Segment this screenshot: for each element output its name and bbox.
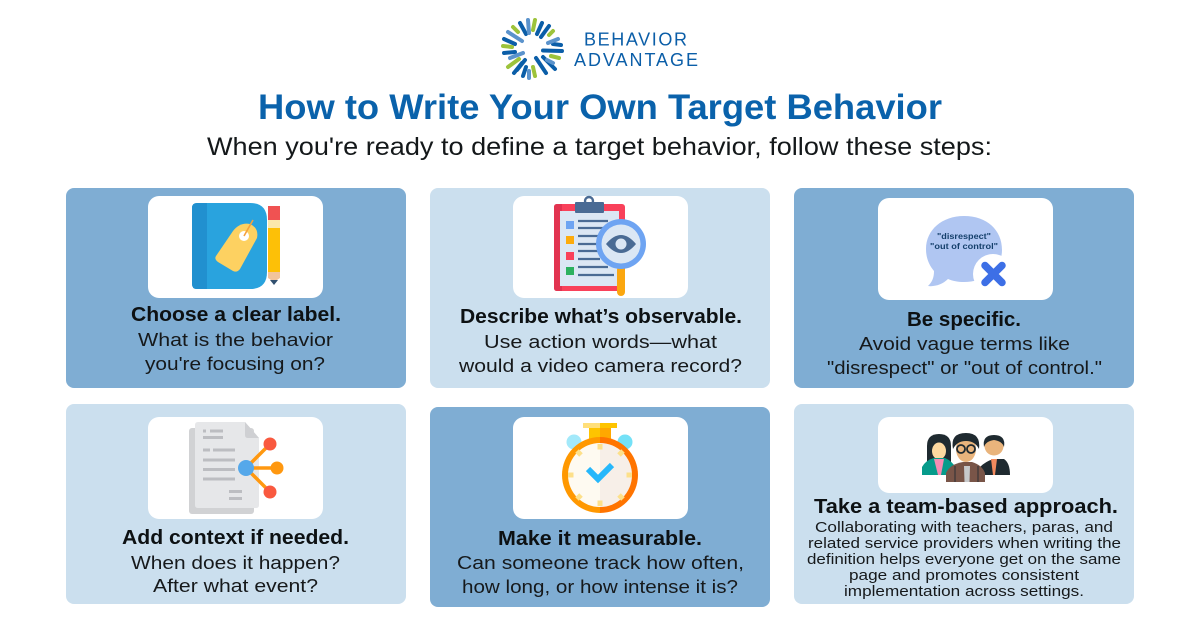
card text — [827, 309, 1102, 378]
logo: Behavior Advantage — [503, 20, 698, 78]
card text: related service providers when writing the — [808, 536, 1121, 552]
card text: implementation across settings. — [844, 584, 1084, 600]
card text: how long, or how intense it is? — [462, 576, 738, 597]
subtitle: When you're ready to define a target behavior, follow these steps: — [207, 133, 992, 161]
panel: make it measurable — [430, 407, 770, 607]
card text: Make it measurable. — [498, 528, 702, 550]
icon: clipboard and magnifier — [554, 197, 646, 296]
card text: After what event? — [153, 575, 318, 596]
panel: add context if needed — [66, 404, 406, 604]
title: How to Write Your Own Target Behavior — [258, 88, 942, 127]
panel: choose a clear label — [66, 188, 406, 388]
panel: describe what's observable — [430, 188, 770, 388]
card text: you're focusing on? — [145, 353, 325, 374]
card text: Can someone track how often, — [457, 552, 744, 573]
card text — [122, 527, 349, 596]
logo wordmark: ADVANTAGE — [574, 50, 698, 70]
icon: speech bubble with X: "disrespect" — [937, 231, 991, 241]
logo wordmark — [574, 30, 698, 70]
card text: definition helps everyone get on the same — [807, 552, 1121, 568]
panel: take a team-based approach — [794, 404, 1134, 604]
icon: team of three people — [922, 433, 1010, 482]
card text: Take a team-based approach. — [814, 496, 1118, 518]
card text — [458, 306, 742, 376]
card text: When does it happen? — [131, 552, 340, 573]
card text: "disrespect" or "out of control." — [827, 357, 1102, 378]
card text: Use action words—what — [484, 331, 717, 352]
icon: document with connected nodes — [189, 422, 284, 514]
icon: notebook with tag and pencil — [192, 203, 280, 289]
icon: stopwatch with checkmark — [562, 423, 638, 513]
panel: be specific — [794, 188, 1134, 388]
card text: Add context if needed. — [122, 527, 349, 549]
icon: logo starburst — [503, 20, 562, 78]
card text: Describe what’s observable. — [460, 306, 742, 328]
icon: speech bubble with X: "out of control" — [930, 241, 998, 251]
card text: Avoid vague terms like — [859, 333, 1070, 354]
logo wordmark: BEHAVIOR — [584, 30, 687, 50]
card text: page and promotes consistent — [849, 568, 1079, 584]
card text: Choose a clear label. — [131, 304, 341, 326]
card text — [807, 496, 1121, 600]
card text: Be specific. — [907, 309, 1021, 331]
card text — [131, 304, 341, 374]
card text: Collaborating with teachers, paras, and — [815, 520, 1113, 536]
card text — [457, 528, 744, 597]
card text: would a video camera record? — [458, 355, 742, 376]
card text: What is the behavior — [138, 329, 333, 350]
icon: speech bubble with X — [926, 216, 1013, 294]
